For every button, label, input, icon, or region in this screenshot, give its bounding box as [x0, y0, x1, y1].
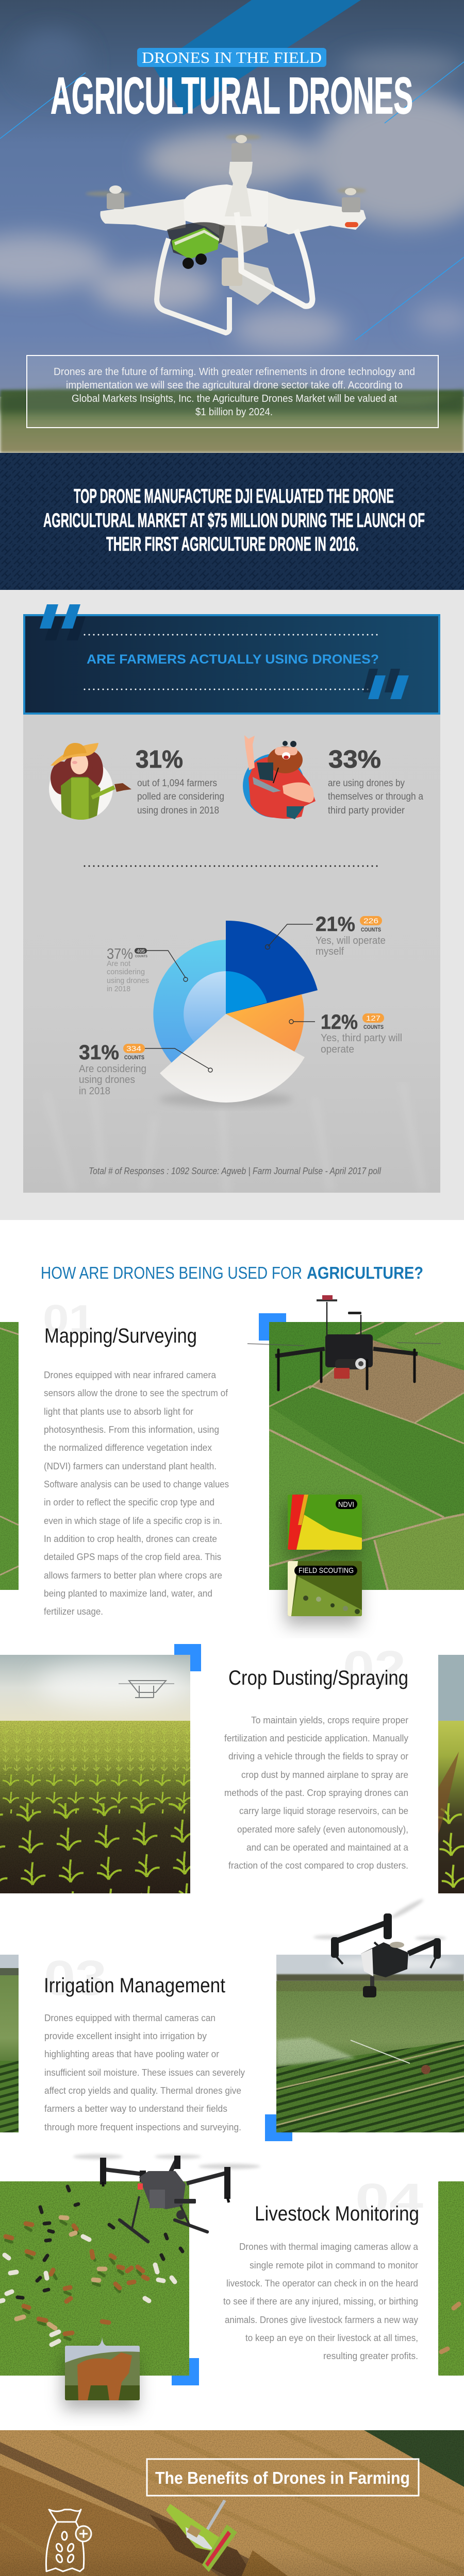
- body text: methods of the past. Crop spraying drones can: [224, 1788, 408, 1798]
- label: 21%: myself: [316, 946, 344, 957]
- label: 37%: Are not: [107, 959, 131, 968]
- slice: 21% operate myself: [226, 921, 318, 1014]
- stat: 33% using: [243, 735, 423, 819]
- harvester: [166, 2500, 237, 2572]
- body text: photosynthesis. From this information, using: [44, 1425, 219, 1435]
- label: 31% considering: [79, 1041, 212, 1097]
- hero drone illustration: [86, 134, 366, 333]
- icon: closing quote mark: [368, 675, 409, 699]
- label: drones in the field: DRONES IN THE FIELD: [142, 48, 322, 66]
- body text: fraction of the cost compared to crop dusters.: [228, 1860, 408, 1871]
- photo: corn sprouts: [0, 1655, 191, 1893]
- body text: single remote pilot in command to monitor: [250, 2260, 418, 2270]
- description: are using drones by: [328, 778, 405, 789]
- body text: allows farmers to better plan where crops are: [44, 1570, 222, 1581]
- label: 21%: [265, 913, 386, 957]
- slice: 37% not considering: [153, 940, 226, 1069]
- photo strip: right: [438, 2181, 464, 2376]
- benefit 03: plan for the future: [0, 2345, 464, 2576]
- heading: how are drones used: HOW ARE DRONES BEING USED FOR: [41, 1263, 302, 1282]
- icon: woman farmer: [49, 743, 131, 824]
- section 02: crop dusting: [0, 1641, 464, 1893]
- body text: detailed GPS maps of the crop field area. This: [44, 1552, 221, 1562]
- inset card: field scouting: FIELD SCOUTING: [299, 1566, 354, 1575]
- accent square: [172, 2358, 199, 2385]
- description: third party provider: [328, 805, 405, 816]
- body text: resulting greater profits.: [323, 2351, 418, 2361]
- body text: insufficient soil moisture. These issues can severely: [44, 2067, 245, 2078]
- heading: ARE FARMERS ACTUALLY USING DRONES?: [87, 652, 379, 667]
- body text: [44, 2013, 245, 2132]
- body text: farmers a better way to understand their fields: [44, 2104, 227, 2114]
- body text: livestock. The operator can check in on the heard: [226, 2278, 418, 2289]
- body text: [223, 2242, 419, 2361]
- body text: [44, 1370, 229, 1617]
- box heading: benefits: [147, 2459, 419, 2496]
- body text: To maintain yields, crops require proper: [251, 1715, 408, 1725]
- watermark number: 04: [355, 2175, 423, 2223]
- label: 31% considering: using drones: [79, 1074, 135, 1086]
- icon: grain sack: [46, 2510, 91, 2571]
- body text: and can be operated and maintained at a: [246, 1842, 409, 1853]
- watermark number: 02: [343, 1641, 406, 1696]
- body text: fertilizer usage.: [44, 1606, 103, 1617]
- source note: Total # of Responses : 1092 Source: Agweb | Farm Journal Pulse - April 2017 poll: [89, 1166, 382, 1176]
- drone with sensor mast: [247, 1295, 441, 1390]
- description: themselves or through a: [328, 791, 423, 802]
- body text: affect crop yields and quality. Thermal drones give: [44, 2086, 241, 2096]
- body text: [224, 1715, 409, 1871]
- benefit 01: increase yields: [0, 2430, 464, 2576]
- matrice drone: [73, 2154, 260, 2242]
- accent square: [174, 1644, 201, 1671]
- description: [328, 778, 423, 816]
- photo strip: right: [438, 1655, 464, 1893]
- intro text box: $1 billion by 2024.: [195, 406, 273, 418]
- section 03: irrigation management: [0, 1897, 464, 2141]
- label: 21%: COUNTS: [361, 927, 381, 933]
- body text: to keep an eye on their livestock at all times,: [245, 2333, 418, 2343]
- label: 37%: 405: [137, 948, 145, 954]
- body text: crop dust by manned airplane to spray are: [241, 1770, 408, 1780]
- slice: 31% considering: [160, 1014, 305, 1103]
- label: 37%: COUNTS: [135, 955, 147, 958]
- inset card: field scouting: [288, 1561, 362, 1616]
- label: 37%: 37%: [107, 946, 133, 962]
- watermark number: 03: [44, 1951, 107, 2006]
- body text: to see if there are any injured, missing, or birthing: [223, 2296, 418, 2307]
- section background: farmer survey: [0, 590, 464, 1220]
- intro text box: implementation we will see the agricultural drone sector take off. According to: [66, 380, 403, 391]
- section 04: livestock monitoring: [0, 2154, 464, 2400]
- description: using drones in 2018: [137, 805, 219, 816]
- inset card: NDVI: [288, 1495, 362, 1550]
- photo: crop rows with dirt tracks: [0, 2345, 464, 2576]
- black and white drone: [313, 1897, 446, 1997]
- body text: the normalized difference vegetation index: [44, 1443, 212, 1453]
- label: 31% considering: Are considering: [79, 1063, 146, 1075]
- heading: how are drones used: AGRICULTURE?: [307, 1263, 423, 1282]
- label: 37%: considering: [107, 968, 145, 976]
- band: DJI market statement: [0, 453, 464, 590]
- number: 31%: [136, 746, 183, 773]
- section 01: mapping and surveying: [0, 1295, 464, 1617]
- label: 12%: [289, 1011, 402, 1055]
- heading: Irrigation Management: [44, 1974, 225, 1997]
- body text: Drones with thermal imaging cameras allow a: [239, 2242, 419, 2252]
- intro text box: Global Markets Insights, Inc. the Agriculture Drones Market will be valued at: [72, 393, 397, 404]
- icon: bearded man with controller: [243, 735, 316, 819]
- label: 12%: Yes, third party will: [321, 1032, 402, 1044]
- heading: Livestock Monitoring: [255, 2202, 419, 2225]
- label: 37%: [107, 946, 188, 993]
- body text: Drones equipped with near infrared camera: [44, 1370, 217, 1380]
- body text: being planted to maximize land, water, and: [44, 1588, 212, 1599]
- body text: carry large liquid storage reservoirs, can be: [239, 1806, 408, 1816]
- body text: In addition to crop health, drones can create: [44, 1534, 217, 1544]
- icon: opening quote mark: [40, 604, 80, 629]
- panel header: are farmers using drones: [24, 604, 439, 714]
- body text: Software analysis can be used to change values: [44, 1479, 229, 1489]
- body text: even in which stage of life a specific crop is in.: [44, 1516, 222, 1526]
- label: 31% considering: in 2018: [79, 1086, 110, 1097]
- body text: (NDVI) farmers can understand plant health.: [44, 1461, 217, 1471]
- label: 21%: 21%: [316, 913, 355, 936]
- heading: Mapping/Surveying: [44, 1325, 197, 1347]
- description: [137, 778, 224, 816]
- label: 31% considering: 31%: [79, 1041, 119, 1064]
- label: 37%: in 2018: [107, 985, 130, 993]
- photo strip: left: [0, 1322, 19, 1590]
- inset card: cow: [65, 2337, 140, 2400]
- stat: 31% considering: [49, 743, 224, 824]
- hero: drone in the sky over a field: [0, 0, 464, 453]
- description: polled are considering: [137, 791, 224, 802]
- small spraying drone: [119, 1681, 174, 1698]
- photo: irrigated field: [276, 1955, 464, 2132]
- body text: light that plants use to absorb light for: [44, 1406, 193, 1417]
- box heading: benefits: The Benefits of Drones in Farming: [155, 2468, 410, 2487]
- body text: operated more safely (even autonomously),: [237, 1824, 408, 1835]
- inset card: NDVI: NDVI: [338, 1500, 354, 1509]
- label: 31% considering: COUNTS: [124, 1055, 144, 1061]
- body text: sensors allow the drone to see the spectrum of: [44, 1388, 228, 1398]
- label: 12%: COUNTS: [363, 1024, 384, 1030]
- label: 21%: Yes, will operate: [316, 935, 386, 946]
- description: out of 1,094 farmers: [137, 778, 217, 789]
- body text: highlighting areas that have pooling water or: [44, 2049, 219, 2059]
- number: 33%: [328, 746, 381, 773]
- body text: fertilization and pesticide application. Manually: [224, 1733, 408, 1743]
- intro text box: [27, 355, 438, 428]
- body text: in order to reflect the specific crop type and: [44, 1497, 214, 1507]
- photo strip: left: [0, 1955, 19, 2132]
- label: 12%: 12%: [321, 1011, 358, 1033]
- accent square: [259, 1313, 286, 1341]
- panel: survey: [23, 714, 440, 1193]
- label: 21%: 226: [363, 917, 378, 925]
- photo: green fields: [269, 1322, 464, 1590]
- label: 31% considering: 334: [126, 1044, 141, 1053]
- chart: survey response pie: [153, 921, 318, 1107]
- body text: animals. Drones give livestock farmers a new way: [225, 2315, 418, 2325]
- watermark number: 01: [43, 1297, 95, 1341]
- photo: harvester in wheat field: [0, 2430, 464, 2576]
- body text: through more frequent inspections and surveying.: [44, 2122, 241, 2132]
- body text: driving a vehicle through the fields to spray or: [228, 1751, 408, 1761]
- body text: Drones equipped with thermal cameras can: [44, 2013, 216, 2023]
- body text: provide excellent insight into irrigation by: [44, 2031, 207, 2041]
- label: 12%: operate: [321, 1044, 354, 1055]
- accent square: [265, 2114, 292, 2141]
- photo: cattle on grass: [0, 2181, 189, 2376]
- label: 12%: 127: [366, 1014, 380, 1022]
- label: 37%: using drones: [107, 976, 149, 985]
- heading: Crop Dusting/Spraying: [228, 1667, 408, 1689]
- slice: 12% third party: [226, 994, 304, 1052]
- intro text box: Drones are the future of farming. With greater refinements in drone technology and: [54, 366, 415, 378]
